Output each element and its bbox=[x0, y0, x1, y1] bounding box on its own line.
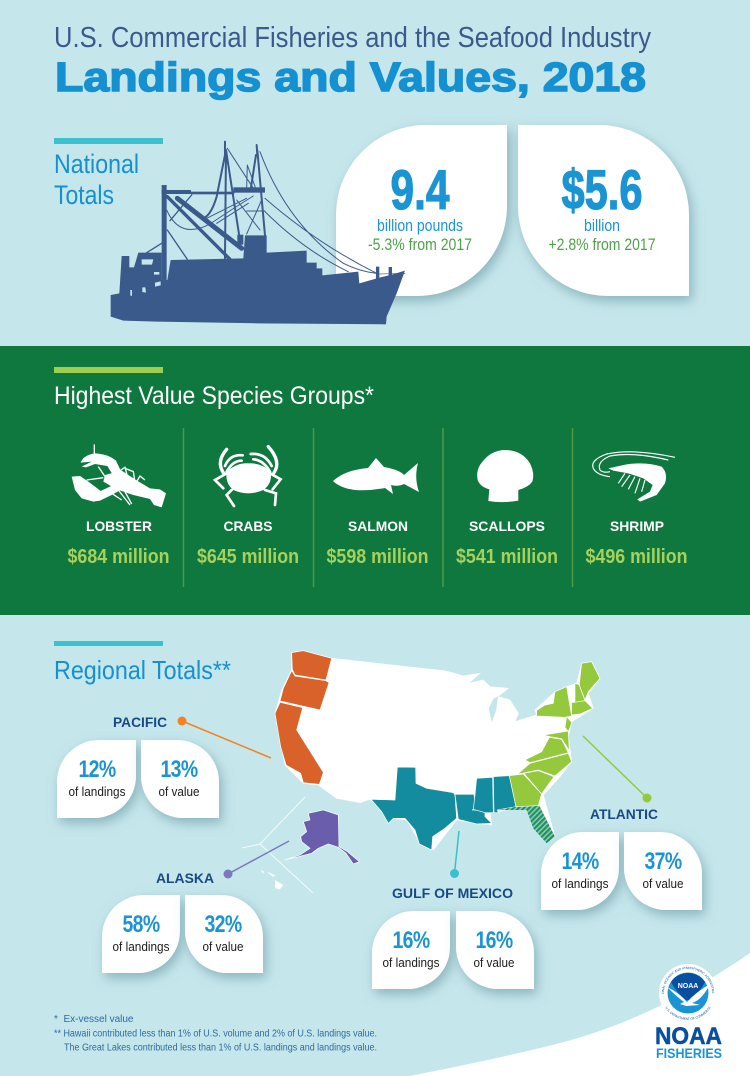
callout: landings pounds: billion pounds bbox=[377, 216, 463, 235]
region: atlantic: ATLANTIC bbox=[590, 807, 658, 822]
logo: noaa fisheries: U.S. DEPARTMENT OF COMMERCE bbox=[666, 1006, 711, 1020]
card: gulf value: 16% bbox=[476, 927, 513, 954]
hawaii bbox=[260, 870, 283, 889]
value: scallops: $541 million bbox=[456, 546, 558, 568]
card: atlantic value: 37% bbox=[644, 848, 682, 875]
card: atlantic landings: 14% bbox=[562, 848, 599, 875]
icon: crab bbox=[215, 447, 281, 506]
card: gulf landings: 16% bbox=[392, 927, 430, 954]
callout: landings value bbox=[518, 125, 689, 296]
card: pacific value: 13% bbox=[160, 756, 198, 783]
label: crabs: CRABS bbox=[224, 518, 272, 534]
value: salmon: $598 million bbox=[326, 546, 428, 568]
title: U.S. Commercial Fisheries and the Seafood Industry bbox=[54, 22, 651, 54]
atlantic states bbox=[509, 662, 600, 807]
card: atlantic value: of value bbox=[642, 876, 684, 891]
title bbox=[54, 22, 651, 100]
leader: gulf bbox=[450, 831, 459, 878]
section: national totals heading: National bbox=[54, 149, 139, 179]
card: alaska value bbox=[185, 895, 263, 973]
label: salmon: SALMON bbox=[348, 518, 408, 534]
card: pacific landings: 12% bbox=[78, 756, 116, 783]
icon: fishing boat bbox=[111, 142, 405, 324]
card: gulf landings bbox=[372, 911, 450, 989]
card: alaska landings: 58% bbox=[122, 911, 160, 938]
region: pacific bbox=[57, 715, 271, 818]
section: national totals heading bbox=[54, 138, 163, 210]
bottom right white curve bbox=[410, 953, 750, 1076]
value: shrimp: $496 million bbox=[586, 546, 688, 568]
icon: shrimp bbox=[593, 452, 675, 502]
region: gulf of mexico bbox=[372, 831, 534, 989]
callout: landings value: $5.6 bbox=[562, 158, 642, 221]
region: pacific: PACIFIC bbox=[113, 715, 167, 730]
heading: species groups: Highest Value Species Groups* bbox=[54, 382, 374, 410]
florida hatched bbox=[498, 806, 555, 843]
value: lobster: $684 million bbox=[68, 546, 170, 568]
gulf states bbox=[371, 767, 516, 850]
callout: landings pounds bbox=[336, 125, 507, 296]
card: pacific landings: of landings bbox=[68, 784, 126, 799]
label: shrimp: SHRIMP bbox=[610, 518, 664, 534]
card: pacific landings bbox=[57, 740, 136, 818]
card: atlantic landings bbox=[541, 832, 619, 910]
value: crabs: $645 million bbox=[197, 546, 299, 568]
footnotes: * Ex-vessel value bbox=[54, 1014, 134, 1025]
region: atlantic bbox=[541, 736, 702, 910]
icon: salmon bbox=[333, 458, 419, 494]
logo: noaa fisheries: NOAA bbox=[655, 1023, 722, 1050]
card: gulf landings: of landings bbox=[382, 955, 440, 970]
label: lobster: LOBSTER bbox=[86, 518, 152, 534]
contiguous base bbox=[275, 651, 600, 850]
callout: landings value: +2.8% from 2017 bbox=[548, 235, 656, 254]
callout: landings pounds: 9.4 bbox=[390, 158, 450, 221]
leader: alaska bbox=[224, 841, 289, 878]
card: gulf value bbox=[456, 911, 534, 989]
region: gulf of mexico: GULF OF MEXICO bbox=[392, 886, 513, 901]
region: alaska: ALASKA bbox=[156, 871, 214, 886]
heading: regional totals bbox=[54, 641, 231, 685]
card: atlantic value bbox=[624, 832, 702, 910]
footnotes bbox=[54, 1014, 377, 1054]
pacific states bbox=[275, 651, 332, 784]
card: alaska value: of value bbox=[202, 939, 244, 954]
map: united states bbox=[260, 651, 600, 889]
card: gulf value: of value bbox=[474, 955, 514, 970]
panel: highest value species bbox=[0, 346, 750, 615]
logo: noaa fisheries: FISHERIES bbox=[656, 1045, 722, 1061]
alaska bbox=[285, 810, 359, 864]
inset divider lines bbox=[242, 797, 313, 893]
heading: regional totals: Regional Totals** bbox=[54, 655, 231, 685]
section: national totals heading: Totals bbox=[54, 180, 114, 210]
region: alaska bbox=[102, 841, 289, 973]
icon: lobster bbox=[72, 444, 166, 507]
card: alaska landings bbox=[102, 895, 180, 973]
card: alaska value: 32% bbox=[204, 911, 242, 938]
logo: noaa fisheries: NOAA bbox=[678, 983, 698, 990]
leader: pacific bbox=[178, 716, 271, 758]
card: pacific value: of value bbox=[158, 784, 200, 799]
footnotes: ** Hawaii contributed less than 1% of U.S. volume and 2% of U.S. landings value. bbox=[54, 1028, 377, 1040]
footnotes: The Great Lakes contributed less than 1% of U.S. landings and landings value. bbox=[64, 1042, 377, 1054]
card: pacific value bbox=[141, 740, 219, 818]
icon: scallop bbox=[477, 450, 533, 502]
card: alaska landings: of landings bbox=[112, 939, 170, 954]
logo: noaa fisheries: NATIONAL OCEANIC AND ATMOSPHERIC ADMINISTRATION bbox=[662, 966, 714, 994]
label: scallops: SCALLOPS bbox=[469, 518, 545, 534]
callout: landings value: billion bbox=[584, 216, 620, 235]
title: Landings and Values, 2018 bbox=[55, 54, 646, 100]
card: atlantic landings: of landings bbox=[552, 876, 609, 891]
leader: atlantic bbox=[583, 736, 652, 802]
callout: landings pounds: -5.3% from 2017 bbox=[368, 235, 472, 254]
